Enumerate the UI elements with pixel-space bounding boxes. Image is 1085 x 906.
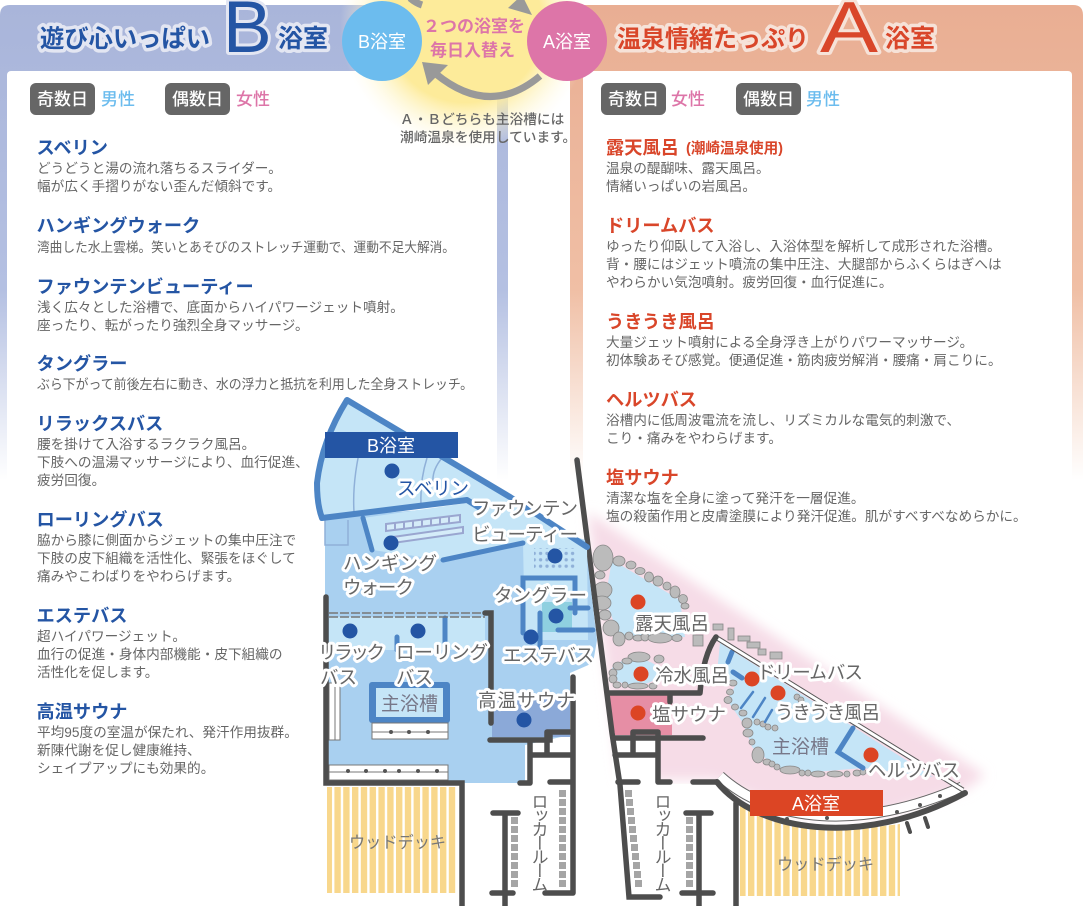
item: 高温サウナ: 高温サウナ	[36, 702, 127, 722]
open-air bath water	[605, 560, 685, 637]
item: ファウンテンビューティー: ファウンテンビューティー	[36, 276, 254, 297]
item: エステバス: エステバス	[36, 606, 127, 626]
label: A bath banner	[750, 790, 883, 816]
item: エステバス: 血行の促進・身体内部機能・皮下組織の	[37, 647, 283, 662]
labels: B facilities: ファウンテン	[472, 498, 578, 519]
fan outline	[317, 400, 587, 547]
bench along arc	[720, 776, 962, 821]
item: ローリングバス: 痛みやこわばりをやわらげます。	[37, 568, 240, 584]
item: タングラー: タングラー	[36, 353, 127, 374]
item: 露天風呂: 露天風呂	[606, 138, 679, 158]
floor plan: A bath	[577, 460, 985, 906]
swap caption: ２つの浴室を	[423, 17, 525, 36]
heading: A bath title: 温泉情緒たっぷり	[617, 26, 809, 53]
item: エステバス	[36, 606, 283, 680]
heading: B bath title: 遊び心いっぱい	[40, 26, 210, 53]
item: 塩サウナ	[606, 468, 1027, 524]
B lockers	[511, 790, 566, 887]
labels: A facilities: 露天風呂	[635, 613, 709, 634]
item: 高温サウナ: 平均95度の室温が保たれ、発汗作用抜群。	[37, 725, 298, 740]
item: スベリン	[36, 138, 282, 194]
tangler area	[542, 602, 572, 632]
white locker room floor	[612, 784, 736, 906]
item: ドリームバス: 背・腰にはジェット噴流の集中圧注、大腿部からふくらはぎへは	[606, 257, 1002, 272]
item: 塩サウナ: 塩の殺菌作用と皮膚塗膜により発汗促進。肌がすべすべなめらかに。	[606, 509, 1027, 524]
item: うきうき風呂: 初体験あそび感覚。便通促進・筋肉疲労解消・腰痛・肩こりに。	[606, 352, 1002, 368]
labels: A facilities: 冷水風呂	[655, 665, 729, 686]
swap caption: 毎日入替え	[430, 41, 515, 60]
panel: B bath white card	[7, 71, 497, 906]
item: 露天風呂: 情緒いっぱいの岩風呂。	[606, 179, 756, 194]
item: うきうき風呂: 大量ジェット噴射による全身浮き上がりパワーマッサージ。	[606, 335, 973, 350]
labels: B facilities: ビューティー	[472, 524, 578, 545]
labels: A facilities: ウッドデッキ	[777, 855, 874, 874]
note: hot spring usage: Ａ・Ｂどちらも主浴槽には	[400, 111, 565, 127]
sauna room	[492, 695, 570, 737]
item: タングラー	[36, 353, 473, 392]
item: 高温サウナ: シェイプアップにも効果的。	[37, 761, 214, 776]
schedule: A bath days: 男性	[806, 90, 840, 109]
item: ドリームバス	[606, 216, 1002, 290]
salt sauna room	[610, 695, 672, 735]
stepping stones	[693, 624, 782, 659]
fountain jets	[534, 548, 576, 570]
schedule: A bath days	[601, 83, 840, 115]
A floor	[588, 512, 985, 816]
labels: A facilities: 塩サウナ	[652, 704, 726, 725]
item: 塩サウナ: 塩サウナ	[606, 468, 679, 488]
arrow: A to B	[422, 62, 540, 97]
note: hot spring usage	[400, 111, 576, 145]
schedule: A bath days: 偶数日	[743, 90, 794, 109]
labels: B facilities: バス	[320, 667, 357, 688]
item: リラックスバス	[36, 414, 309, 488]
schedule: B bath days: 男性	[101, 90, 135, 109]
item: ドリームバス: ドリームバス	[606, 216, 715, 236]
benches	[329, 683, 448, 780]
wood deck B	[327, 787, 457, 893]
labels: A facilities: ロッカールーム	[652, 793, 670, 892]
item: 露天風呂: (潮崎温泉使用)	[686, 139, 783, 157]
panel: B bath background band	[0, 5, 508, 480]
item: ヘルツバス: ヘルツバス	[606, 390, 697, 410]
item: ハンギングウォーク: 湾曲した水上雲梯。笑いとあそびのストレッチ運動で、運動不足大解消。	[37, 239, 455, 255]
yellow glow behind swap diagram	[330, 0, 610, 155]
diagram: daily swap of baths	[342, 0, 607, 97]
panel: A bath background band	[570, 5, 1083, 480]
item: 高温サウナ: 新陳代謝を促し健康維持、	[37, 742, 201, 758]
labels: B facilities: ウッドデッキ	[349, 833, 446, 852]
label: A bath banner: A浴室	[792, 794, 840, 814]
circle: A bath	[527, 1, 607, 81]
heading: A bath title	[617, 0, 935, 68]
item: タングラー: ぶら下がって前後左右に動き、水の浮力と抵抗を利用した全身ストレッチ。	[37, 376, 473, 392]
item: リラックスバス: 下肢への温湯マッサージにより、血行促進、	[37, 454, 309, 470]
item: ハンギングウォーク	[36, 215, 455, 255]
markers: A facilities	[630, 594, 878, 762]
heading: B bath title	[40, 0, 328, 68]
labels: A facilities: 主浴槽	[772, 736, 829, 758]
A walls	[577, 460, 965, 906]
item: ローリングバス	[36, 509, 296, 584]
labels: B facilities: タングラー	[494, 585, 587, 606]
item: 塩サウナ: 清潔な塩を全身に塗って発汗を一層促進。	[606, 491, 864, 506]
labels: B facilities: 高温サウナ	[478, 690, 575, 711]
relax rooms	[329, 617, 485, 650]
labels: B facilities: バス	[396, 667, 433, 688]
schedule: B bath days	[30, 83, 270, 115]
note: hot spring usage: 潮崎温泉を使用しています。	[400, 129, 576, 145]
circle: B bath	[342, 1, 422, 81]
item: ヘルツバス: こり・痛みをやわらげます。	[606, 430, 782, 446]
item: うきうき風呂	[606, 312, 1002, 368]
item: リラックスバス: 疲労回復。	[37, 472, 105, 488]
schedule: A bath days: 奇数日	[608, 90, 659, 109]
item: ローリングバス: ローリングバス	[36, 509, 164, 530]
B walls	[326, 597, 573, 906]
tangler walls	[397, 578, 593, 650]
labels: B facilities: ローリング	[396, 642, 488, 663]
item: ファウンテンビューティー: 浅く広々とした浴槽で、底面からハイパワージェット噴射。	[37, 300, 404, 315]
item: ローリングバス: 下肢の皮下組織を活性化、緊張をほぐして	[37, 551, 296, 566]
labels: B facilities: スベリン	[397, 478, 469, 499]
slide fan	[317, 400, 587, 547]
labels: B facilities: ハンギング	[343, 553, 437, 574]
swap caption	[423, 17, 525, 60]
item: 高温サウナ	[36, 702, 298, 776]
item: スベリン: 幅が広く手摺りがない歪んだ傾斜です。	[37, 179, 281, 194]
labels: A facilities: うきうき風呂	[775, 702, 880, 723]
item: スベリン: スベリン	[36, 138, 108, 158]
item: うきうき風呂: うきうき風呂	[606, 312, 715, 332]
label: B bath banner: B浴室	[367, 436, 415, 456]
main B bath: 主浴槽	[381, 693, 438, 715]
item: エステバス: 活性化を促します。	[37, 665, 158, 680]
schedule: A bath days: 女性	[671, 90, 705, 109]
panel: A bath white card	[583, 71, 1072, 906]
labels: A facilities	[635, 613, 960, 892]
item: ファウンテンビューティー	[36, 276, 404, 333]
heading: A bath title: 浴室	[885, 25, 935, 53]
rocks around open-air bath	[593, 545, 689, 646]
white box beside lockers	[612, 738, 658, 786]
circle: B bath: B浴室	[358, 32, 406, 52]
labels: B facilities	[318, 478, 594, 892]
item: ハンギングウォーク: ハンギングウォーク	[36, 215, 200, 236]
item: ヘルツバス	[606, 390, 960, 446]
A lockers	[625, 790, 693, 887]
text list: A bath facilities	[606, 138, 1027, 524]
item: エステバス: 超ハイパワージェット。	[37, 629, 186, 644]
item: ファウンテンビューティー: 座ったり、転がったり強烈全身マッサージ。	[37, 318, 309, 333]
label: B bath banner	[325, 432, 458, 458]
hanging walk bars	[386, 515, 463, 543]
item: スベリン: どうどうと湯の流れ落ちるスライダー。	[37, 160, 282, 176]
item: ドリームバス: ゆったり仰臥して入浴し、入浴体型を解析して成形された浴槽。	[606, 239, 1001, 254]
item: リラックスバス: リラックスバス	[36, 414, 163, 434]
wood deck A	[740, 803, 900, 896]
heading: B bath title: 浴室	[278, 25, 328, 53]
slide inner lines	[325, 440, 442, 545]
main B bath	[369, 682, 450, 723]
B floor	[325, 505, 597, 783]
item: リラックスバス: 腰を掛けて入浴するラクラク風呂。	[37, 437, 255, 452]
labels: B facilities: ウォーク	[343, 577, 414, 598]
labels: A facilities: ヘルツバス	[868, 760, 960, 781]
circle: A bath: A浴室	[543, 32, 591, 52]
rocks around cold bath	[609, 652, 664, 689]
schedule: B bath days: 偶数日	[172, 90, 223, 109]
item: ヘルツバス: 浴槽内に低周波電流を流し、リズミカルな電気的刺激で、	[606, 413, 960, 428]
schedule: B bath days: 女性	[236, 90, 270, 109]
text list: B bath facilities	[36, 138, 473, 776]
labels: A facilities: ドリームバス	[757, 662, 863, 683]
markers: B facilities	[342, 464, 564, 728]
item: 露天風呂	[606, 138, 783, 194]
rocks around main A bath	[724, 680, 866, 777]
hanging walk and fountain rooms	[363, 503, 588, 640]
schedule: B bath days: 奇数日	[37, 90, 88, 109]
labels: B facilities: ロッカールーム	[528, 793, 548, 892]
item: ローリングバス: 脇から膝に側面からジェットの集中圧注で	[37, 533, 296, 548]
hanging walk walls	[363, 518, 523, 560]
bath partitions	[728, 652, 863, 768]
labels: B facilities: リラック	[318, 642, 385, 663]
cold bath water	[611, 659, 659, 685]
labels: B facilities: エステバス	[503, 645, 594, 666]
main A bath water	[717, 643, 933, 777]
dashed partition	[329, 613, 485, 617]
item: 露天風呂: 温泉の醍醐味、露天風呂。	[606, 160, 770, 176]
item: ドリームバス: やわらかい気泡噴射。疲労回復・血行促進に。	[606, 274, 892, 290]
diagonal bench	[717, 638, 963, 790]
bench dots	[346, 730, 439, 773]
floor plan: B bath	[317, 400, 597, 906]
arrow: B to A	[410, 0, 532, 15]
